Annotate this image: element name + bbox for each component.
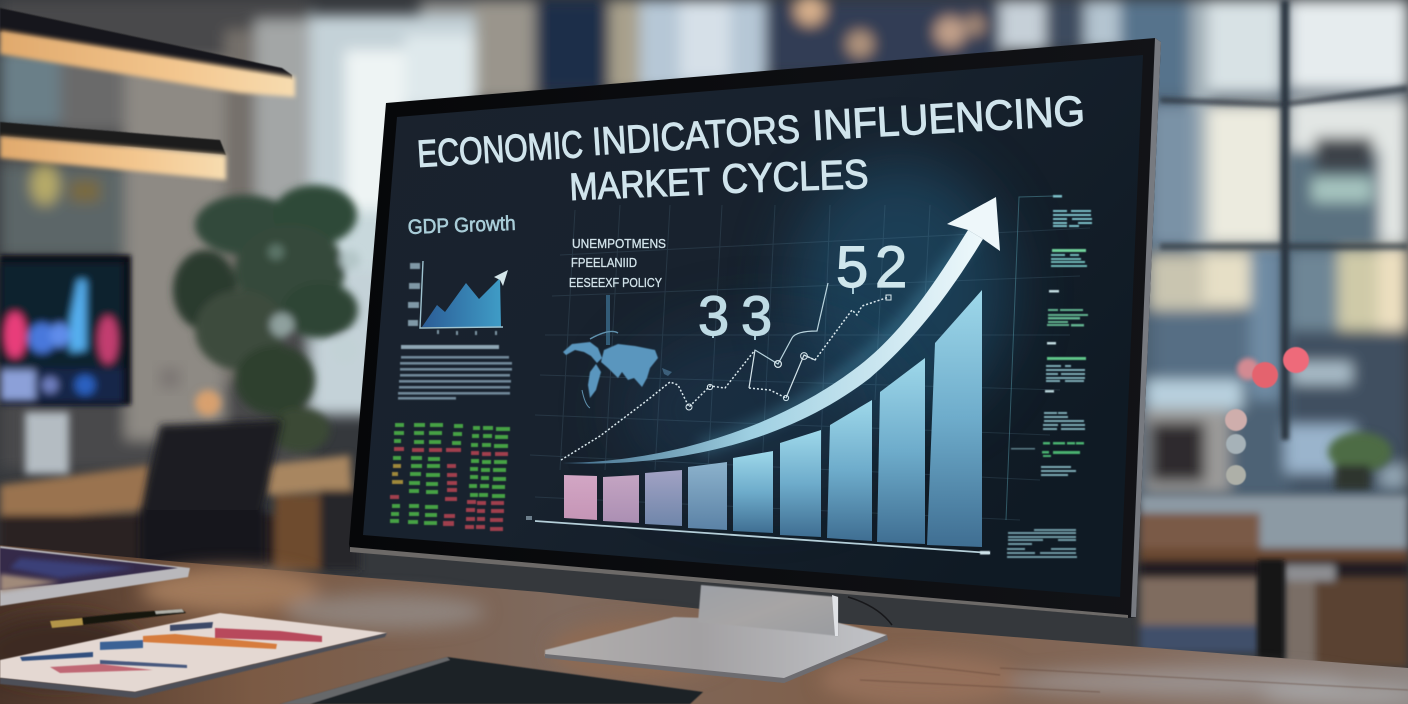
monitor stand [545, 585, 888, 683]
window mullions [1160, 0, 1408, 440]
x axis [535, 521, 990, 553]
paragraph text block [398, 345, 512, 400]
pendant lamp lower [0, 122, 226, 180]
stand base [545, 617, 887, 682]
cable [848, 597, 892, 625]
indicator labels: FPEELANIID [571, 256, 637, 270]
value 52: 5 [836, 235, 868, 300]
heading: GDP Growth: GDP Growth [407, 212, 516, 239]
indicator labels [569, 237, 666, 290]
bracket line [1006, 196, 1054, 520]
pen [50, 609, 186, 628]
chart grid [530, 205, 1090, 520]
title [416, 87, 1086, 209]
title: ECONOMIC [416, 124, 584, 176]
right desk [1140, 495, 1408, 550]
magazine on desk [0, 546, 190, 606]
value 33 [698, 284, 772, 347]
monitor frame [349, 38, 1161, 618]
chair [140, 420, 282, 565]
right side text notes [980, 195, 1092, 558]
red lights [1225, 347, 1309, 485]
title: MARKET [569, 161, 711, 209]
growth arrow [562, 197, 1000, 464]
value 52 [836, 235, 907, 300]
printed report on desk [0, 613, 387, 698]
plant left [173, 185, 360, 452]
chart axis labels [408, 263, 497, 335]
pendant lamp upper [0, 8, 295, 97]
indicator labels: UNEMPOTMENS [572, 237, 666, 251]
top wall, poster, middle windows [420, 0, 480, 15]
GDP area chart [408, 261, 508, 335]
stock table [390, 423, 510, 531]
equipment at right [1147, 380, 1242, 410]
trend lines [561, 283, 891, 460]
value 52: 2 [875, 235, 907, 300]
small monitor left [0, 255, 221, 474]
monitor screen [363, 55, 1143, 597]
green rows [390, 423, 510, 525]
desk reflections [0, 568, 1408, 704]
bar chart [526, 290, 990, 553]
value 33: 3 [741, 284, 772, 347]
right windows [1120, 0, 1408, 500]
stand neck [698, 585, 838, 636]
black notebook [280, 657, 703, 704]
plant right [1328, 432, 1392, 490]
title: CYCLES [721, 151, 869, 202]
red and yellow cells [390, 447, 508, 531]
wooden desk [0, 545, 1408, 704]
ceiling and left wall [0, 0, 310, 470]
centre window [310, 15, 475, 415]
indicator labels: EESEEXF POLICY [569, 276, 663, 290]
world map icon [563, 295, 672, 408]
title: INFLUENCING [811, 87, 1086, 149]
value 33: 3 [698, 284, 729, 347]
title: INDICATORS [591, 108, 801, 164]
back desks [0, 455, 1408, 668]
chart arrow [494, 270, 508, 286]
